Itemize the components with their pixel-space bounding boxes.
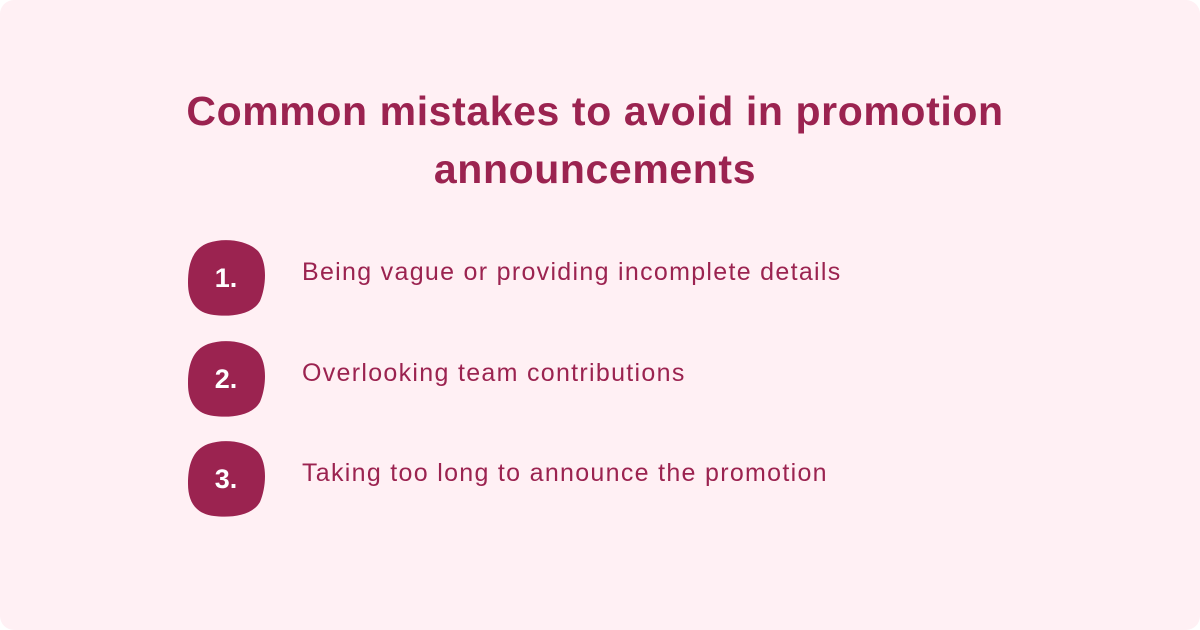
title: announcements [434, 146, 756, 192]
icon: blob 3 [188, 441, 265, 517]
icon: blob 2 [188, 341, 265, 417]
item 3 [188, 441, 828, 517]
title: Common mistakes to avoid in promotion [186, 88, 1004, 134]
item 1 [188, 240, 842, 316]
icon: blob 1 [188, 240, 265, 316]
number 2: 2. [215, 364, 237, 394]
title [186, 88, 1004, 192]
text 1: Being vague or providing incomplete details [302, 258, 842, 286]
item 2 [188, 341, 686, 417]
text 3: Taking too long to announce the promotion [302, 459, 828, 487]
number 3: 3. [215, 464, 237, 494]
number 1: 1. [215, 263, 237, 293]
text 2: Overlooking team contributions [302, 359, 686, 387]
